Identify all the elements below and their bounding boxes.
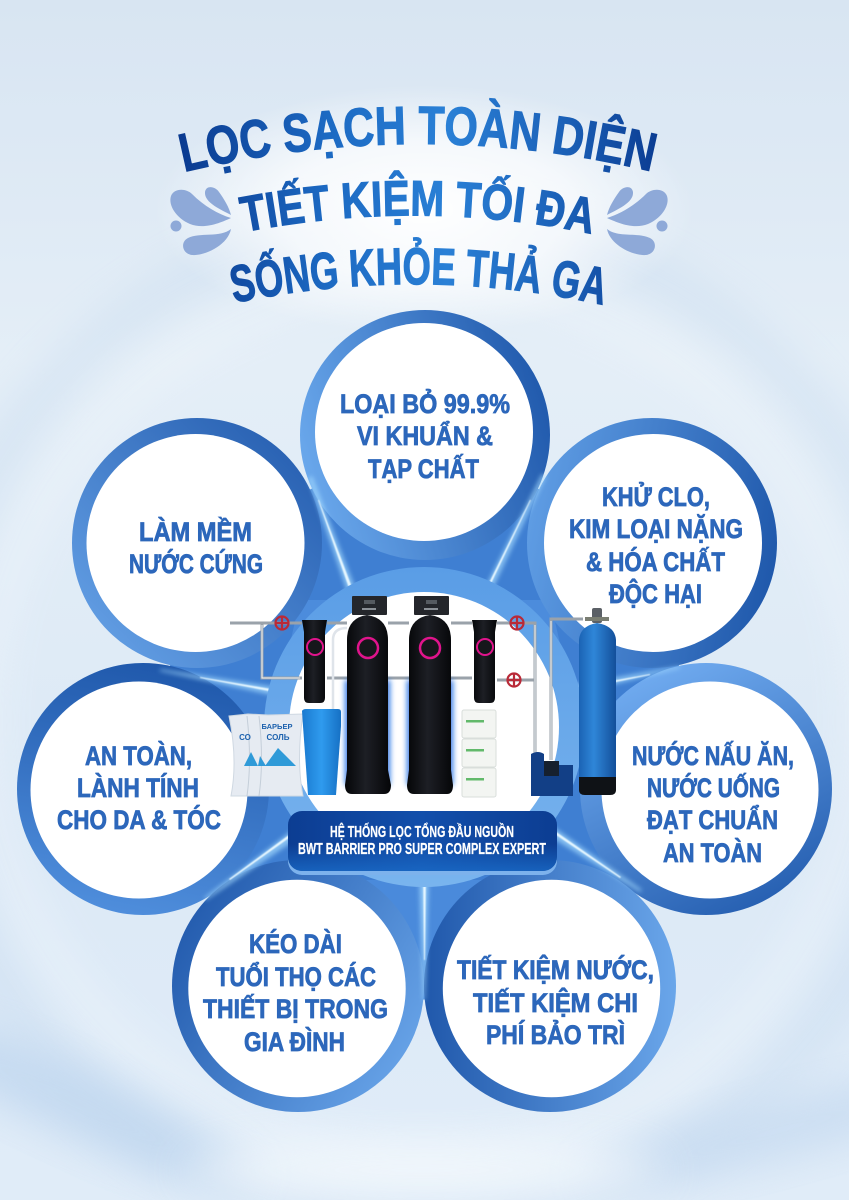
- panel: safe for skin and hair: AN TOÀN,: [85, 740, 192, 771]
- light rays: [160, 474, 680, 1000]
- central glow disc: [264, 567, 584, 887]
- central white disc: [289, 592, 559, 862]
- title: LỌC SẠCH TOÀN DIỆN: [178, 98, 658, 174]
- panel: safe cooking and drinking water: AN TOÀN: [663, 837, 762, 868]
- panel: remove chlorine: [544, 434, 762, 652]
- panel: save water and maintenance cost: PHÍ BẢO TRÌ: [486, 1018, 625, 1050]
- valves: [275, 616, 524, 687]
- icon: left water splash: [170, 187, 231, 255]
- cartridge filters: [302, 620, 327, 703]
- panel: save water and maintenance cost: [443, 880, 660, 1097]
- circle: top right ring: [527, 418, 777, 668]
- panel: soften hard water: LÀM MỀM: [139, 516, 252, 547]
- title: SỐNG KHỎE THẢ GA: [230, 237, 603, 306]
- blue star backdrop: [143, 435, 706, 1000]
- glow: [345, 680, 390, 785]
- salt bags: [229, 714, 303, 796]
- title: TIẾT KIỆM TỐI ĐA: [238, 170, 592, 234]
- panel: remove bacteria: LOẠI BỎ 99.9%: [340, 387, 510, 419]
- panel: safe cooking and drinking water: NƯỚC NẤU ĂN,: [632, 740, 794, 771]
- panel: safe for skin and hair: [30, 682, 248, 898]
- panel: safe cooking and drinking water: NƯỚC UỐNG: [647, 771, 780, 803]
- panel: extend appliance life: THIẾT BỊ TRONG: [203, 993, 388, 1024]
- pump: [531, 752, 573, 796]
- caption banner: BWT BARRIER PRO SUPER COMPLEX EXPERT: [298, 841, 546, 858]
- panel: soften hard water: [86, 434, 304, 652]
- panel: remove chlorine: & HÓA CHẤT: [586, 546, 725, 577]
- pipes: [230, 619, 583, 775]
- panel: safe for skin and hair: CHO DA & TÓC: [57, 804, 221, 835]
- panel: remove chlorine: KHỬ CLO,: [602, 480, 710, 512]
- product: filtration system: СОЛЬ: [267, 733, 290, 742]
- caption banner: [288, 811, 557, 875]
- caption banner: HỆ THỐNG LỌC TỔNG ĐẦU NGUỒN: [330, 821, 514, 841]
- panel: safe cooking and drinking water: ĐẠT CHUẨN: [647, 804, 778, 835]
- panel: remove bacteria: TẠP CHẤT: [368, 453, 479, 484]
- blue salt container: [302, 709, 341, 795]
- panel: save water and maintenance cost: TIẾT KIỆM CHI: [473, 987, 638, 1018]
- panel: remove chlorine: ĐỘC HẠI: [609, 578, 702, 609]
- panel: safe cooking and drinking water: [602, 682, 818, 898]
- panel: remove bacteria: [315, 323, 533, 541]
- circle: top ring: [300, 310, 550, 560]
- circle: top left ring: [72, 418, 322, 668]
- panel: extend appliance life: TUỔI THỌ CÁC: [216, 961, 376, 992]
- tanks: [345, 615, 391, 794]
- product: filtration system: [229, 596, 616, 797]
- circle: left middle ring: [17, 663, 269, 915]
- circle: bottom left ring: [172, 860, 424, 1112]
- tube: [333, 628, 347, 712]
- panel: extend appliance life: [188, 880, 406, 1097]
- panel: remove chlorine: KIM LOẠI NẶNG: [569, 513, 743, 544]
- panel: extend appliance life: GIA ĐÌNH: [244, 1026, 345, 1057]
- panel: soften hard water: NƯỚC CỨNG: [129, 548, 263, 579]
- icon: right water splash: [607, 187, 668, 255]
- panel: save water and maintenance cost: TIẾT KIỆM NƯỚC,: [457, 954, 654, 985]
- circle: bottom right ring: [424, 860, 676, 1112]
- title: [178, 98, 658, 306]
- panel: remove bacteria: VI KHUẨN &: [357, 420, 493, 451]
- panel: safe for skin and hair: LÀNH TÍNH: [77, 772, 199, 803]
- media buckets: [462, 710, 496, 797]
- product: filtration system: СО: [239, 733, 251, 742]
- panel: extend appliance life: KÉO DÀI: [249, 928, 342, 959]
- product: filtration system: БАРЬЕР: [262, 722, 292, 731]
- blue tank: [579, 623, 616, 778]
- circle: right middle ring: [580, 663, 832, 915]
